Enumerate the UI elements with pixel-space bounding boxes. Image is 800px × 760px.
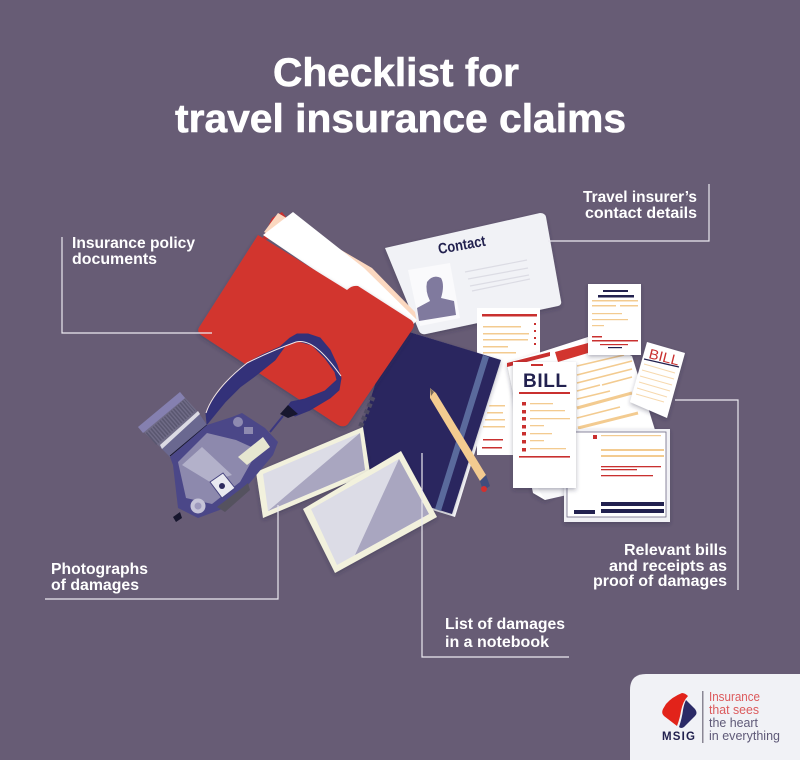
logo panel: MSIG bbox=[630, 674, 800, 760]
photo two bbox=[303, 451, 437, 573]
paper: tilted sheet bbox=[507, 337, 655, 500]
icon: camera with strap bbox=[138, 334, 341, 522]
paper: back sheet under main bill bbox=[533, 470, 620, 500]
callout: insurance policy documents bbox=[62, 235, 212, 333]
photo one bbox=[256, 427, 370, 518]
icon: contact card bbox=[385, 213, 561, 334]
tagline: the heart bbox=[709, 715, 758, 730]
icon: red folder with papers bbox=[198, 212, 417, 426]
camera lens bbox=[138, 392, 207, 457]
callout: relevant bills and receipts: and receipts as bbox=[609, 558, 727, 575]
title: travel insurance claims bbox=[175, 97, 626, 141]
callout: travel insurer's contact details bbox=[548, 184, 709, 241]
callout: relevant bills and receipts: Relevant bills bbox=[624, 542, 727, 559]
callout: list of damages in a notebook: in a notebook bbox=[445, 634, 549, 651]
callout: photographs of damages: of damages bbox=[51, 577, 139, 594]
icon: MSIG diamond bbox=[662, 693, 696, 728]
paper: red list sheet bbox=[477, 308, 540, 455]
paper: small tilted bill: BILL bbox=[647, 345, 681, 368]
paper: invoice top bbox=[588, 284, 641, 355]
paper: main BILL sheet: BILL bbox=[523, 371, 567, 392]
tagline bbox=[709, 689, 780, 743]
tagline: in everything bbox=[709, 728, 780, 743]
paper: small tilted bill bbox=[630, 342, 685, 418]
callout: photographs of damages bbox=[45, 505, 278, 599]
callout: relevant bills and receipts bbox=[593, 400, 738, 590]
camera strap bbox=[206, 334, 341, 424]
title: Checklist for bbox=[273, 51, 519, 95]
card heading: Contact bbox=[437, 233, 487, 258]
portrait placeholder bbox=[408, 263, 460, 326]
icon: pencil bbox=[430, 388, 490, 492]
paper: framed invoice bbox=[564, 429, 670, 522]
icon: photographs bbox=[256, 427, 437, 573]
callout: insurance policy documents: documents bbox=[72, 251, 157, 268]
callout: insurance policy documents: Insurance policy bbox=[72, 235, 195, 252]
icon: notebook bbox=[345, 327, 503, 517]
card text lines bbox=[465, 260, 530, 291]
callout: list of damages in a notebook bbox=[422, 453, 569, 657]
callout: photographs of damages: Photographs bbox=[51, 561, 148, 578]
paper: main BILL sheet bbox=[513, 362, 576, 488]
icon: bills and receipts bbox=[507, 284, 685, 522]
callout: list of damages in a notebook: List of damages bbox=[445, 616, 565, 633]
camera body bbox=[170, 413, 278, 522]
tagline: that sees bbox=[709, 702, 759, 717]
tagline: Insurance bbox=[709, 689, 760, 704]
callout: relevant bills and receipts: proof of damages bbox=[593, 573, 727, 590]
title bbox=[175, 51, 626, 141]
callout: travel insurer's contact details: contact details bbox=[585, 205, 697, 222]
logo wordmark: MSIG bbox=[662, 731, 695, 743]
callout: travel insurer's contact details: Travel insurer’s bbox=[583, 189, 697, 206]
